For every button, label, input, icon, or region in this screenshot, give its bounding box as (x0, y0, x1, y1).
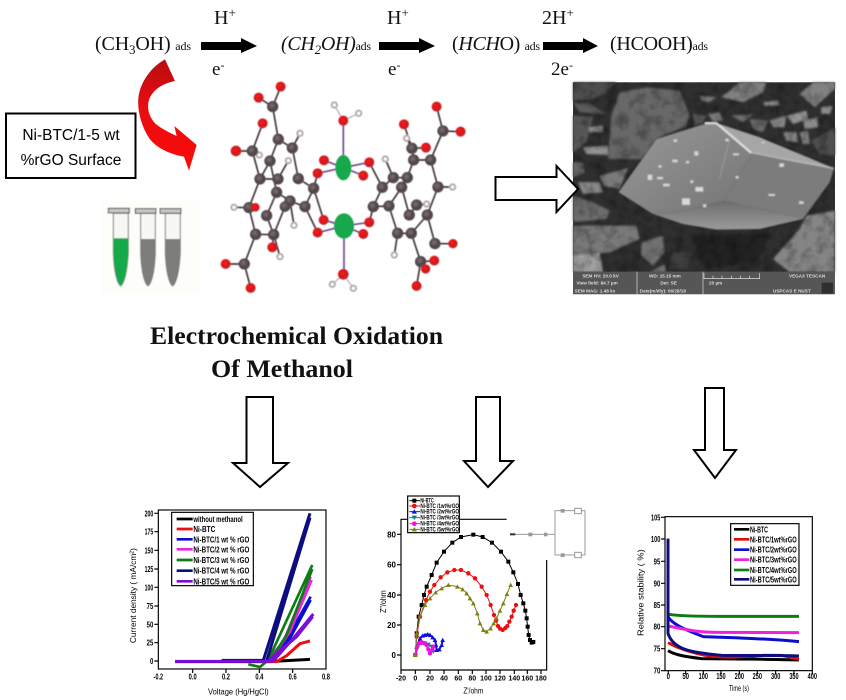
y axis numbers: 70 (654, 666, 661, 676)
title: Electrochemical Oxidation Of Methanol: Electrochemical Oxidation (150, 323, 443, 350)
y axis numbers: 200 (145, 508, 154, 518)
legend: without methanol (193, 515, 243, 524)
species: HCOOH adsorbed: (HCOOH)ads (610, 33, 708, 55)
species: HCHO adsorbed: (HCHO) ads (452, 33, 540, 55)
data curves (175, 513, 313, 667)
tube with grey suspension (135, 209, 156, 286)
molecular structure: Ni-BTC ball and stick (221, 82, 466, 293)
x axis numbers: 300 (771, 671, 781, 681)
step 2 electron label: e (388, 59, 396, 80)
y axis numbers: 50 (147, 619, 154, 629)
plot frame (401, 519, 547, 670)
y axis title: Current density ( mA/cm²) (128, 548, 138, 643)
step 3 proton label: + (566, 5, 574, 20)
x axis numbers: 20 (426, 676, 434, 683)
legend: Ni-BTC/1wt%rGO (750, 535, 797, 544)
reaction equation: methanol oxidation pathway (95, 5, 708, 80)
species: CH3OH adsorbed: 3 (129, 42, 136, 57)
step 2 electron label: - (396, 58, 400, 72)
x axis numbers: -0.2 (154, 672, 163, 682)
legend: Ni-BTC/5wt%rGO (750, 575, 797, 584)
x axis numbers: 250 (753, 671, 762, 681)
species: CH2OH adsorbed: OH) (321, 33, 356, 55)
x axis numbers: 350 (789, 671, 799, 681)
legend: Ni-BTC /5wt%rGO (420, 527, 459, 533)
x axis numbers: 0 (667, 671, 670, 681)
legend (408, 496, 459, 533)
y axis numbers: 0 (392, 651, 397, 660)
x axis numbers: 100 (699, 671, 708, 681)
step 1 electron label: - (220, 58, 224, 72)
SEM info bar: SEM HV: 20.0 kV (582, 274, 620, 279)
arrow: step 1 (201, 38, 257, 53)
x axis numbers: 150 (716, 671, 726, 681)
equivalent circuit inset (507, 500, 587, 559)
plot frame (665, 517, 812, 671)
y axis numbers: 90 (654, 578, 661, 588)
legend (731, 524, 799, 585)
label box: Ni-BTC/1-5 wt %rGO surface: Ni-BTC/1-5 wt (22, 127, 120, 144)
x axis numbers (154, 672, 330, 682)
y axis numbers: 80 (387, 530, 397, 539)
y axis numbers: 75 (654, 644, 661, 654)
y axis numbers: 75 (147, 601, 154, 611)
tube with green suspension (108, 208, 129, 286)
x axis numbers (396, 676, 547, 683)
y axis numbers: 100 (651, 534, 661, 544)
axis ticks (397, 534, 541, 674)
step 1 electron label: e (212, 59, 220, 80)
x axis title: Voltage (Hg/HgCl) (208, 686, 269, 696)
SEM info bar: USPCAS E NUST (773, 288, 811, 293)
x axis numbers: 160 (521, 676, 533, 683)
noise texture over rubble (573, 82, 835, 272)
arrow: down to stability chart (694, 388, 736, 478)
label box: Ni-BTC/1-5 wt %rGO surface: %rGO Surface (21, 152, 121, 169)
plot frame (158, 510, 326, 669)
species: CH3OH adsorbed: OH) (135, 33, 171, 55)
y axis numbers: 25 (147, 638, 154, 648)
x axis numbers: -20 (396, 676, 406, 683)
axis ticks (661, 517, 812, 675)
x axis numbers: 0.8 (322, 672, 330, 682)
y axis numbers (387, 530, 397, 660)
x axis numbers: 0.0 (189, 672, 197, 682)
x axis numbers: 50 (682, 671, 689, 681)
crystal faces (619, 123, 834, 230)
legend: Ni-BTC (750, 525, 768, 534)
x axis numbers: 200 (735, 671, 744, 681)
y axis numbers: 125 (145, 564, 154, 574)
SEM info bar: View field: 84.7 µm (576, 281, 618, 286)
step 3 proton label: 2H (542, 7, 566, 29)
second tube with grey suspension (160, 209, 181, 286)
chart: Nyquist impedance plot (378, 496, 587, 696)
bonds (226, 87, 461, 288)
x axis numbers: 100 (480, 676, 492, 683)
step 1 proton label: + (228, 5, 236, 20)
y axis numbers: 150 (145, 545, 154, 555)
arrow: down to impedance chart (464, 397, 513, 487)
arrow: down to voltammetry chart (233, 397, 288, 487)
legend: Ni-BTC/2wt%rGO (750, 546, 797, 555)
x axis numbers: 180 (535, 676, 547, 683)
SEM info bar: VEGA3 TESCAN (789, 274, 826, 279)
species: CH2OH adsorbed: ads (356, 39, 371, 53)
legend: Ni-BTC /1wt%rGO (420, 504, 459, 510)
y axis numbers: 20 (387, 621, 397, 630)
step 2 proton label: H (387, 7, 401, 29)
legend: Ni-BTC (420, 499, 434, 505)
data curves (668, 539, 799, 660)
legend: Ni-BTC/5 wt % rGO (193, 577, 249, 586)
legend (172, 512, 253, 586)
x axis numbers: 0.2 (222, 672, 230, 682)
chart: relative stability vs time (636, 512, 817, 693)
x axis numbers (667, 671, 817, 681)
title: Electrochemical Oxidation Of Methanol (150, 323, 443, 383)
y axis numbers: 100 (145, 582, 154, 592)
x axis numbers: 60 (454, 676, 462, 683)
y axis numbers: 60 (387, 561, 397, 570)
legend: Ni-BTC/4 wt % rGO (193, 567, 249, 576)
y axis numbers: 175 (145, 527, 154, 537)
SEM info bar: WD: 15.15 mm (649, 274, 681, 279)
y axis title: Z"/ohm (378, 590, 388, 613)
axis ticks (154, 513, 293, 673)
y axis numbers (145, 508, 154, 666)
y axis numbers: 85 (654, 600, 661, 610)
background rubble (573, 82, 835, 272)
y axis numbers: 105 (651, 512, 661, 522)
legend: Ni-BTC (193, 525, 216, 534)
x axis title: Time (s) (729, 683, 749, 693)
step 3 electron label: - (569, 58, 573, 72)
legend: Ni-BTC /3wt%rGO (420, 516, 459, 522)
x axis numbers: 0.4 (255, 672, 264, 682)
SEM info bar: 20 µm (709, 281, 722, 286)
crystal surface specks (648, 139, 804, 207)
nickel atoms (334, 155, 354, 239)
SEM info bar: Date(m/d/y): 06/28/18 (640, 288, 686, 293)
x axis numbers: 0 (413, 676, 417, 683)
x axis title: Z'/ohm (463, 686, 483, 696)
SEM info bar: Det: SE (660, 281, 677, 286)
y axis numbers (651, 512, 661, 676)
legend: Ni-BTC/3 wt % rGO (193, 556, 249, 565)
SEM info bar: SEM MAG: 1.48 kx (575, 288, 616, 293)
title: Electrochemical Oxidation Of Methanol: Of Methanol (211, 356, 353, 383)
species: CH2OH adsorbed: (CH (281, 33, 315, 55)
label box: Ni-BTC/1-5 wt %rGO surface (6, 114, 136, 178)
arrow: step 2 (379, 38, 435, 53)
legend: Ni-BTC/4wt%rGO (750, 566, 797, 575)
legend: Ni-BTC/2 wt % rGO (193, 545, 249, 554)
x axis numbers: 400 (808, 671, 817, 681)
x axis numbers: 40 (440, 676, 448, 683)
y axis numbers: 40 (387, 591, 397, 600)
x axis numbers: 0.6 (289, 672, 297, 682)
step 1 proton label: H (214, 7, 228, 29)
y axis title: Relative stability ( %) (636, 549, 646, 636)
SEM micrograph of Ni-BTC crystal (573, 82, 835, 294)
species: CH2OH adsorbed: 2 (315, 42, 322, 57)
species: CH3OH adsorbed: (CH (95, 33, 129, 55)
data series (415, 535, 533, 655)
legend: Ni-BTC/3wt%rGO (750, 556, 797, 565)
x axis numbers: 80 (468, 676, 476, 683)
carbon atoms (239, 101, 449, 270)
step 3 electron label: 2e (551, 59, 569, 80)
species: CH3OH adsorbed: ads (175, 39, 191, 53)
y axis numbers: 80 (654, 622, 661, 632)
SEM info bar (573, 272, 835, 294)
legend: Ni-BTC/1 wt % rGO (193, 535, 249, 544)
step 2 proton label: + (401, 5, 409, 20)
oxygen atoms (221, 82, 466, 293)
arrow: molecule to SEM image (496, 166, 578, 212)
y axis numbers: 0 (150, 656, 154, 666)
x axis numbers: 140 (508, 676, 520, 683)
x axis numbers: 120 (494, 676, 506, 683)
icon: three sample tubes (100, 200, 200, 293)
legend: Ni-BTC /4wt%rGO (420, 522, 459, 528)
legend: Ni-BTC /2wt%rGO (420, 510, 459, 516)
icon: curved red arrow (138, 59, 197, 171)
hydrogen atoms (231, 102, 455, 291)
y axis numbers: 95 (654, 556, 661, 566)
chart: current density vs voltage (128, 508, 330, 696)
arrow: step 3 (543, 38, 598, 53)
